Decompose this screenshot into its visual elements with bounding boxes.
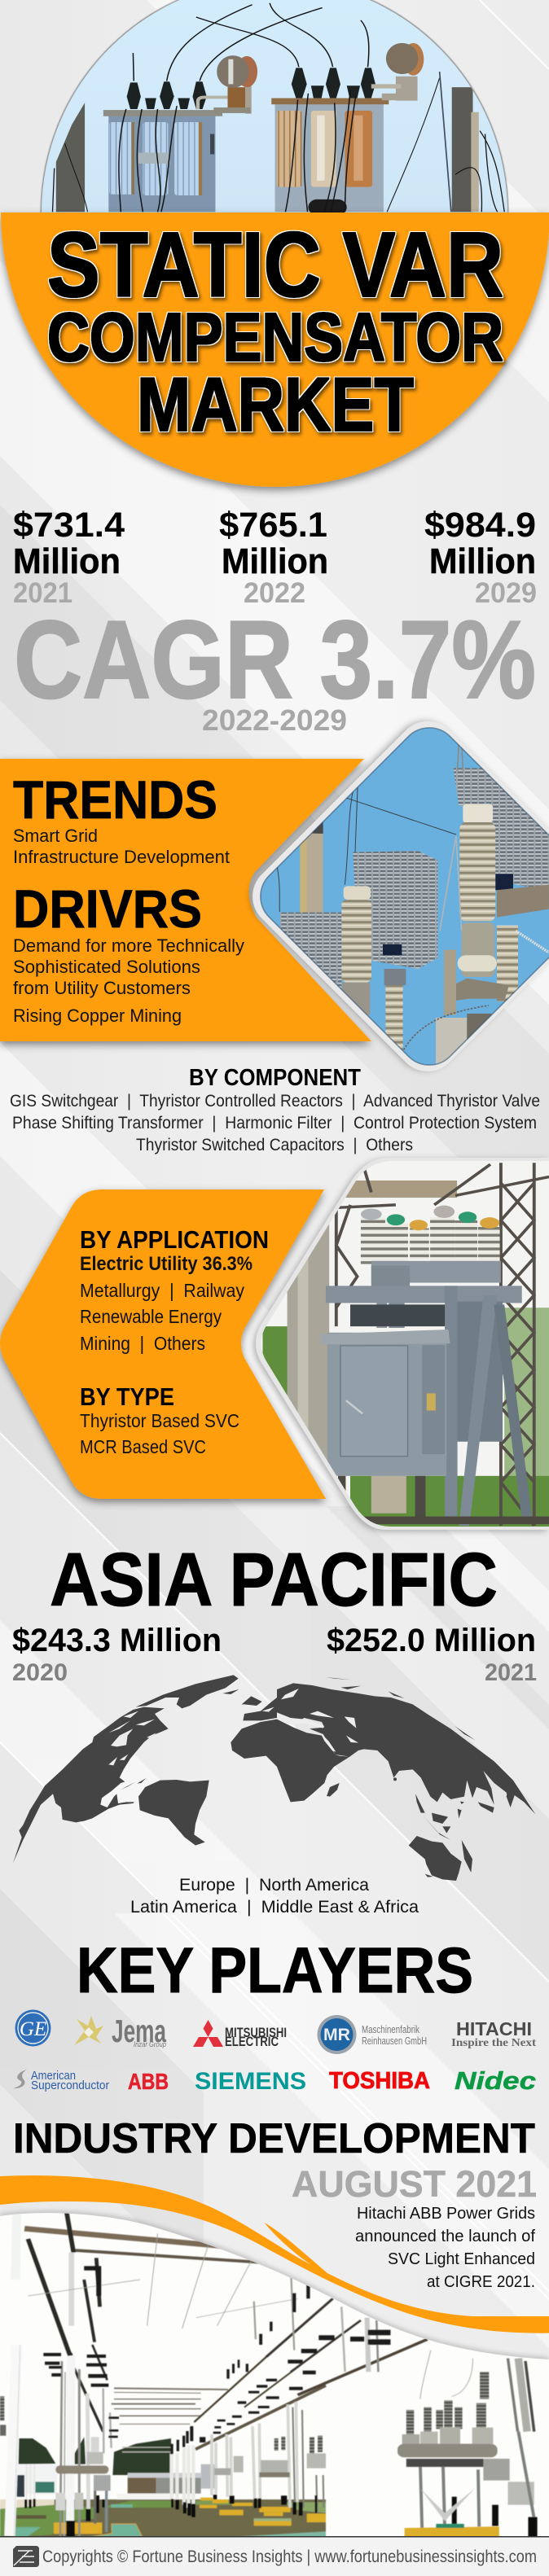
breaker head and frame <box>326 1265 533 1526</box>
text: drivers list: Rising Copper Mining <box>13 1005 182 1026</box>
logo: American Superconductor: Superconductor <box>31 2079 109 2092</box>
text: development description <box>355 2205 535 2291</box>
left transformer tank <box>103 110 222 212</box>
world map dome <box>13 1675 535 1883</box>
right conservator tank <box>371 43 424 101</box>
text: component list: Thyristor Switched Capacitors | Others <box>136 1135 413 1154</box>
gantry beams <box>112 2388 228 2452</box>
title panel: orange semicircle <box>1 212 549 487</box>
text: application list <box>80 1253 253 1354</box>
diagonal dark beams <box>65 2345 326 2449</box>
text: drivers list: Demand for more Technically <box>13 935 244 956</box>
title: static var compensator market <box>47 213 503 447</box>
logo: American Superconductor <box>13 2069 109 2092</box>
stat: asia pacific 2021 <box>327 1623 537 1686</box>
upper photo scene: beams, wires, right equipment <box>15 2212 538 2537</box>
CAGR headline: 2022-2029 <box>202 703 347 737</box>
logo: Mitsubishi Electric: MITSUBISHI <box>225 2025 287 2040</box>
right bushings <box>292 68 376 99</box>
right concrete pole <box>452 87 479 212</box>
hero photo: transformers in circular frame <box>33 0 521 216</box>
black insulator rows <box>43 2349 317 2454</box>
right coil cage <box>454 768 549 890</box>
text: drivers list <box>13 935 244 1026</box>
text: development description: announced the launch of <box>355 2228 535 2245</box>
stat: 2022 market value: $765.1 <box>219 506 327 545</box>
logo: General Electric: GE <box>20 2018 46 2040</box>
insulators and caps <box>361 1206 501 1283</box>
centre coil cage <box>353 851 437 969</box>
logo: General Electric <box>15 2009 51 2047</box>
left bushings <box>127 81 207 109</box>
stat: 2021 market value <box>13 506 125 609</box>
stat: 2021 market value: 2021 <box>13 577 72 609</box>
left concrete pole <box>56 103 85 212</box>
stat: asia pacific 2020 <box>12 1623 222 1686</box>
text: trends list <box>13 826 230 867</box>
text: development description: SVC Light Enhanced <box>388 2250 535 2268</box>
logo: Maschinenfabrik Reinhausen <box>318 2015 427 2054</box>
steel columns <box>10 2345 323 2536</box>
logo: Mitsubishi Electric <box>193 2020 287 2049</box>
stat: 2021 market value: $731.4 <box>13 506 125 545</box>
stat: asia pacific 2020: 2020 <box>12 1659 68 1686</box>
text: type list: MCR Based SVC <box>80 1436 206 1457</box>
heading: trends: TRENDS <box>13 769 217 830</box>
swoosh shadow along photo edge <box>0 2213 549 2359</box>
stat: 2022 market value: 2022 <box>244 577 305 609</box>
pillar <box>300 817 323 914</box>
logo: Mitsubishi Electric: ELECTRIC <box>225 2034 279 2049</box>
lattice and wires <box>276 741 549 1053</box>
switchgear tanks <box>0 2396 326 2510</box>
logo: Jema: Jema <box>112 2014 166 2049</box>
logo: Jema: Irizar Group <box>134 2040 166 2048</box>
logo: Maschinenfabrik Reinhausen: Reinhausen GmbH <box>362 2035 427 2047</box>
pads <box>15 2498 326 2537</box>
ground <box>0 2499 326 2538</box>
icon: Fortune Business Insights logo <box>13 2546 39 2567</box>
logo: ABB: ABB <box>128 2069 169 2094</box>
heading: key players: KEY PLAYERS <box>77 1934 473 2006</box>
black feet <box>24 2495 317 2537</box>
steel lattice <box>331 1163 549 1526</box>
buildings <box>16 2464 217 2499</box>
heading: by application: BY APPLICATION <box>80 1225 269 1254</box>
centre insulator column <box>341 886 406 1050</box>
heading: drivers: DRIVRS <box>13 878 202 939</box>
heading: industry development: INDUSTRY DEVELOPMENT <box>13 2115 535 2162</box>
footer bar <box>0 2536 549 2576</box>
text: development description: Hitachi ABB Power Grids <box>357 2205 535 2223</box>
text: component list <box>10 1091 540 1154</box>
base frame and cabinets <box>436 950 509 1067</box>
logo: Jema <box>74 2014 166 2049</box>
logo: Hitachi <box>451 2018 536 2049</box>
stat: 2022 market value <box>219 506 328 609</box>
logo: American Superconductor: American <box>31 2069 76 2083</box>
logo: Nidec: Nidec <box>455 2066 536 2095</box>
text: type list <box>80 1410 239 1457</box>
stat: asia pacific 2020: $243.3 Million <box>12 1623 222 1658</box>
left coil cage <box>280 913 341 994</box>
title: static var compensator market: MARKET <box>137 361 414 447</box>
substation photo <box>0 2198 549 2540</box>
text: application list: Renewable Energy <box>80 1306 222 1327</box>
left conservator tank <box>198 55 257 114</box>
heading: asia pacific: ASIA PACIFIC <box>50 1537 498 1622</box>
diamond photo: reactor coils and insulators <box>239 708 549 1084</box>
logo: Maschinenfabrik Reinhausen: Maschinenfabrik <box>362 2023 419 2035</box>
text: trends list: Smart Grid <box>13 826 98 846</box>
heading: by component: BY COMPONENT <box>189 1065 361 1091</box>
text: drivers list: from Utility Customers <box>13 978 191 998</box>
text: application list: Electric Utility 36.3% <box>80 1253 253 1275</box>
stat: 2029 market value: 2029 <box>475 577 537 609</box>
lower photo scene: ground, trees, columns, pads <box>0 2345 326 2538</box>
logo: Maschinenfabrik Reinhausen: MR <box>323 2026 350 2044</box>
logo: Hitachi: Inspire the Next <box>451 2037 536 2049</box>
hexagon photo: outdoor circuit breaker <box>253 1156 549 1531</box>
concrete beam and pillar <box>288 1181 457 1514</box>
text: development description: at CIGRE 2021. <box>427 2273 535 2291</box>
panel: trends and drivers <box>0 759 371 1041</box>
heading: august 2021: AUGUST 2021 <box>292 2163 537 2205</box>
logo: Siemens: SIEMENS <box>195 2068 306 2095</box>
panel: by application and by type arrow <box>0 1189 326 1499</box>
upper columns and conductors <box>15 2212 534 2432</box>
stat: 2021 market value: Million <box>13 541 121 581</box>
dark diagonal beams <box>28 2212 428 2395</box>
stat: 2029 market value <box>424 506 537 609</box>
stat: asia pacific 2021: 2021 <box>485 1659 537 1686</box>
text: other regions <box>130 1876 419 1917</box>
text: drivers list: Sophisticated Solutions <box>13 957 200 977</box>
orange swoosh band <box>0 2175 549 2333</box>
heading: by type: BY TYPE <box>80 1382 174 1411</box>
text: application list: Metallurgy | Railway <box>80 1280 244 1301</box>
control cabinet <box>320 1330 549 1524</box>
stat: asia pacific 2021: $252.0 Million <box>327 1623 536 1658</box>
logo: Toshiba: TOSHIBA <box>329 2068 430 2094</box>
right transformer tank <box>271 99 389 215</box>
rusty gantry beams <box>24 2228 289 2264</box>
overhead wires <box>52 3 504 212</box>
logo: Hitachi: HITACHI <box>456 2018 532 2039</box>
right insulator column <box>458 804 549 1001</box>
text: other regions: Latin America | Middle East & Africa <box>130 1898 419 1917</box>
stat: 2029 market value: Million <box>429 541 536 581</box>
foliage <box>262 1308 549 1529</box>
switchgear tanks on right <box>397 2372 538 2537</box>
trees <box>19 2437 171 2475</box>
stat: 2022 market value: Million <box>222 541 328 581</box>
black insulators upper <box>84 2266 390 2353</box>
text: other regions: Europe | North America <box>179 1876 369 1895</box>
text: application list: Mining | Others <box>80 1333 205 1354</box>
text: type list: Thyristor Based SVC <box>80 1410 239 1431</box>
stat: 2029 market value: $984.9 <box>424 506 536 545</box>
text: trends list: Infrastructure Development <box>13 847 230 867</box>
